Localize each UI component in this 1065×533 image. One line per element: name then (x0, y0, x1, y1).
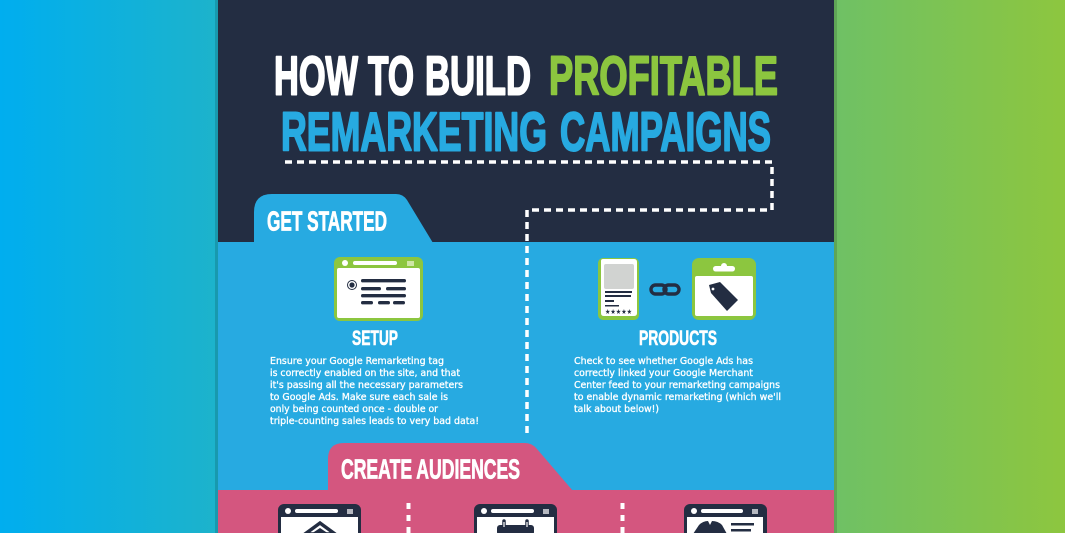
title: HOW (274, 44, 358, 106)
dashed connector arrow path (285, 162, 772, 438)
text: setup body: Ensure your Google Remarketing tag (270, 356, 444, 367)
title: REMARKETING (281, 100, 547, 162)
tab: create audiences (328, 443, 573, 491)
panel: create audiences section (218, 443, 834, 533)
icon: product card: ★★★★★ (605, 308, 632, 316)
icon: clothing window (684, 504, 767, 533)
icon: chain link (651, 285, 679, 294)
panel: dark header (218, 0, 834, 243)
title (274, 44, 778, 162)
heading: create audiences: CREATE AUDIENCES (341, 454, 520, 484)
icon: product card (598, 258, 639, 320)
text: products body: talk about below!) (574, 404, 659, 415)
icon: calendar window (474, 504, 557, 533)
text: setup body: only being counted once - double or (270, 404, 438, 415)
text: products body (574, 356, 781, 415)
icon: home window (278, 504, 361, 533)
text: setup body: triple-counting sales leads to very bad data! (270, 416, 479, 427)
icon: setup browser window (334, 257, 423, 321)
dotted dividers (408, 503, 622, 533)
text: products body: correctly linked your Google Merchant (574, 368, 753, 379)
text: products body: Center feed to your remarketing campaigns (574, 380, 780, 391)
icon: price tag card (692, 258, 756, 320)
title: TO (368, 44, 414, 106)
heading: products: PRODUCTS (639, 327, 717, 350)
title: CAMPAIGNS (560, 100, 771, 162)
text: setup body (270, 356, 479, 427)
heading: get started: GET STARTED (267, 206, 387, 236)
panel: get started section (218, 194, 834, 492)
title: BUILD (425, 44, 531, 106)
text: setup body: it's passing all the necessary parameters (270, 380, 463, 391)
text: setup body: to Google Ads. Make sure each sale is (270, 392, 448, 403)
tab: get started (254, 194, 433, 243)
heading: setup: SETUP (352, 327, 398, 350)
text: products body: to enable dynamic remarketing (which we'll (574, 392, 781, 403)
text: products body: Check to see whether Google Ads has (574, 356, 753, 367)
text: setup body: is correctly enabled on the site, and that (270, 368, 460, 379)
panel shadow (215, 0, 837, 533)
title: PROFITABLE (549, 44, 778, 106)
